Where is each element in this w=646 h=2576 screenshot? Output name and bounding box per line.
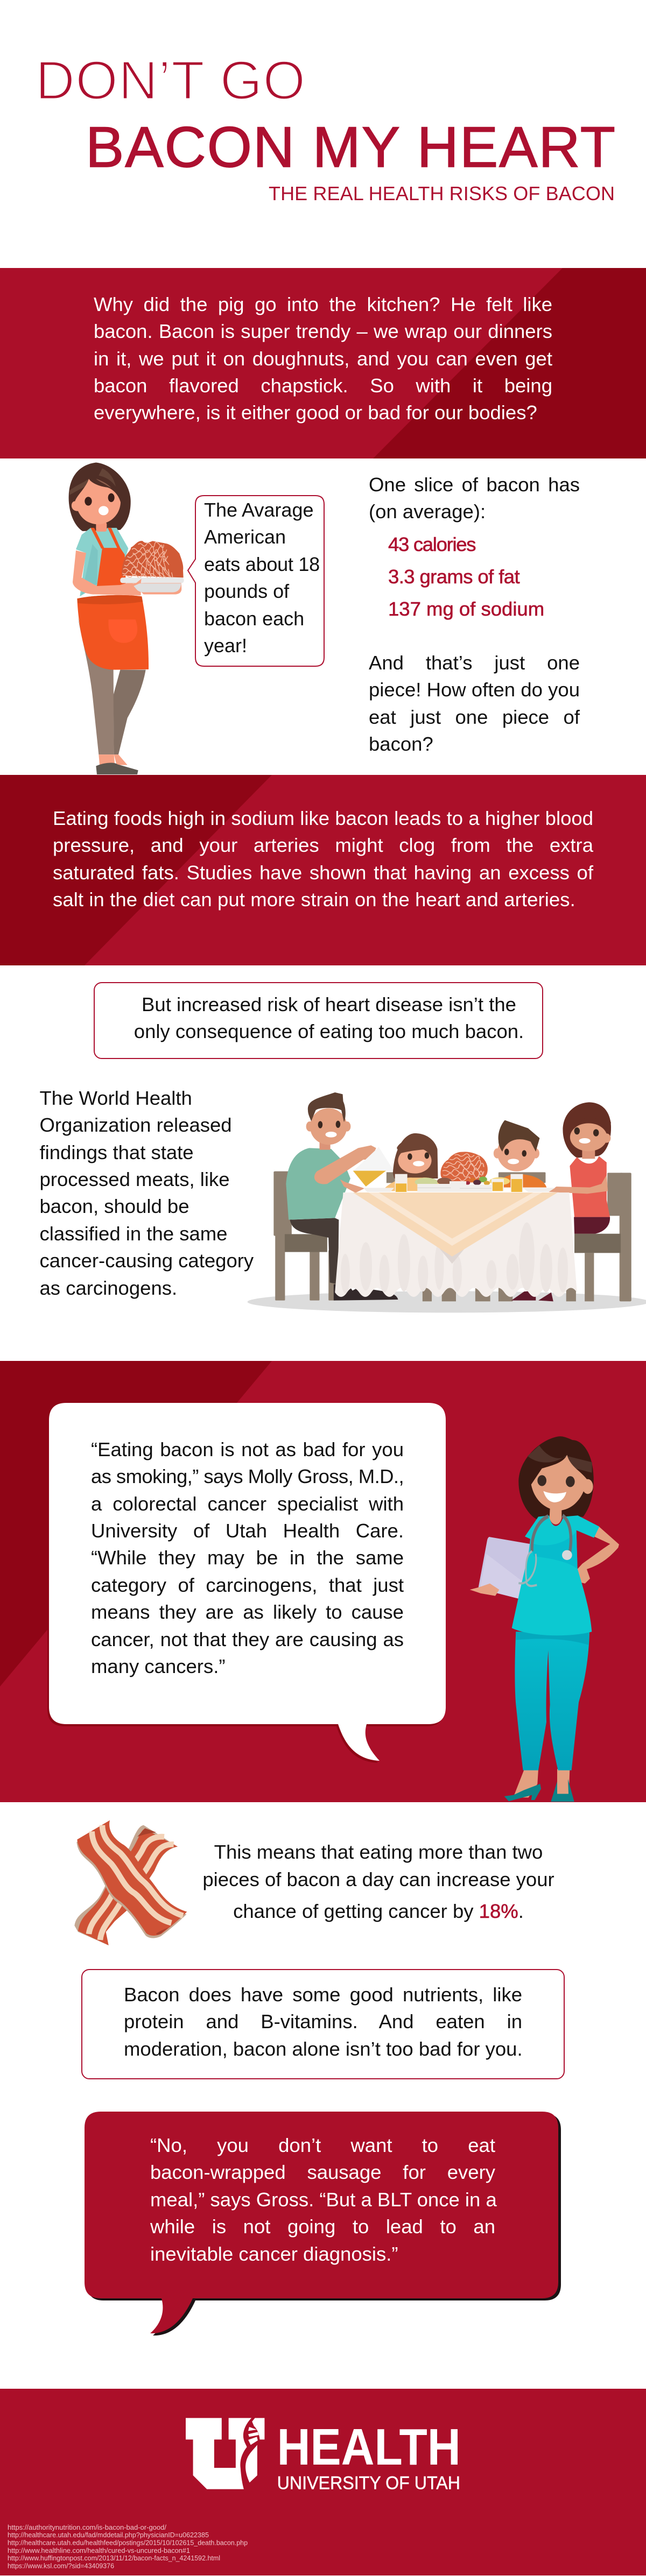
closing question: piece! How often do you <box>369 679 580 701</box>
nurse scrub top <box>512 1515 599 1635</box>
text block: World Health Organization: The World Health <box>40 1087 192 1109</box>
speech bubble: BLT quote <box>81 2107 565 2338</box>
arm <box>73 551 141 595</box>
callout: good nutrients <box>81 1969 565 2079</box>
bacon pile <box>122 541 184 580</box>
sodium text: pressure, and your arteries might clog from the extra <box>53 834 593 856</box>
illustration: crossed bacon strips <box>74 1820 187 1945</box>
closing question: eat just one piece of <box>369 706 580 728</box>
logo: University of Utah Health <box>172 2400 474 2508</box>
clipboard <box>478 1537 530 1600</box>
panel: doctor quote band <box>0 1361 646 1802</box>
girl <box>383 1133 446 1191</box>
stethoscope <box>518 1515 572 1586</box>
sodium band dark corner <box>0 775 272 965</box>
chairs <box>273 1171 631 1301</box>
mouth <box>99 506 109 515</box>
text block: World Health Organization: bacon, should be <box>40 1195 189 1217</box>
text block: 18 percent: chance of getting cancer by 18%. <box>233 1900 524 1922</box>
nurse hand <box>470 1584 499 1596</box>
tablecloth <box>335 1192 577 1297</box>
text block: World Health Organization <box>40 1087 254 1299</box>
man shoes <box>334 1284 398 1301</box>
bubble text <box>204 499 320 657</box>
source list: http://www.healthline.com/health/cured-vs-uncured-bacon#1 <box>8 2546 190 2554</box>
nutrition facts: 137 mg of sodium <box>388 598 544 620</box>
callout text <box>134 993 524 1042</box>
sodium text: Eating foods high in sodium like bacon leads to a higher blood <box>53 807 593 829</box>
text block: World Health Organization: as carcinogens. <box>40 1277 177 1299</box>
logo U mark <box>186 2418 251 2489</box>
quote text: bacon-wrapped sausage for every <box>150 2161 495 2183</box>
quote text: a colorectal cancer specialist with <box>91 1493 404 1514</box>
hair <box>69 462 131 531</box>
intro text <box>94 293 552 424</box>
callout text: only consequence of eating too much bacon. <box>134 1020 524 1042</box>
sodium text: saturated fats. Studies have shown that having an excess of <box>53 862 593 884</box>
quote text: while is not going to lead to an <box>150 2215 495 2238</box>
nurse neck <box>550 1508 561 1525</box>
boy <box>494 1120 546 1188</box>
text block: World Health Organization: processed meats, like <box>40 1168 229 1190</box>
source list: https://authoritynutrition.com/is-bacon-bad-or-good/ <box>8 2523 166 2531</box>
woman <box>511 1102 611 1301</box>
panel: intro band <box>0 268 646 458</box>
hand <box>122 578 142 596</box>
intro band dark corner <box>373 268 646 458</box>
pants <box>78 617 114 754</box>
woman shoes <box>511 1290 553 1301</box>
feet <box>99 754 128 765</box>
subtitle: THE REAL HEALTH RISKS OF BACON <box>269 182 615 204</box>
callout text: moderation, bacon alone isn’t too bad for you. <box>124 2038 523 2060</box>
callout text: Bacon does have some good nutrients, like <box>124 1984 522 2006</box>
quote band dark corner <box>0 1361 272 1686</box>
shirt <box>76 528 128 596</box>
apron <box>90 528 126 586</box>
back strip shadow <box>74 1825 178 1945</box>
glasses of juice <box>395 1174 523 1192</box>
panel: footer band <box>0 2389 646 2575</box>
quote text: means they are as likely to cause <box>91 1601 404 1623</box>
nutrition intro: One slice of bacon has <box>369 474 580 496</box>
quote text: cancer, not that they are causing as <box>91 1628 404 1650</box>
face <box>72 479 121 524</box>
speech bubble: Molly Gross quote <box>47 1403 446 1763</box>
nurse shoes <box>504 1779 574 1802</box>
callout text: But increased risk of heart disease isn’t the <box>142 993 516 1015</box>
nutrition intro <box>369 474 580 523</box>
closing question <box>369 652 580 755</box>
intro text: everywhere, is it either good or bad for our bodies? <box>94 401 537 424</box>
man arms <box>314 1145 376 1184</box>
text block: World Health Organization: classified in the same <box>40 1223 227 1245</box>
title <box>36 51 615 204</box>
text block: World Health Organization: findings that state <box>40 1141 194 1163</box>
nurse hair <box>518 1436 594 1519</box>
callout text <box>124 1981 522 2063</box>
source list <box>0 2523 258 2574</box>
title line: Don't Go: DON’T GO <box>36 51 305 111</box>
bubble text: bacon each <box>204 608 304 630</box>
nurse legs <box>513 1769 570 1797</box>
intro text: bacon flavored chapstick. So with it being <box>94 375 552 397</box>
pitcher <box>353 1147 394 1187</box>
man trousers <box>290 1218 339 1285</box>
text block: 18 percent: This means that eating more than two <box>214 1841 543 1863</box>
source list: http://www.huffingtonpost.com/2013/11/12/bacon-facts_n_4241592.html <box>8 2554 220 2562</box>
source list: http://healthcare.utah.edu/fad/mddetail.php?physicianID=u0622385 <box>8 2531 209 2539</box>
bubble text: pounds of <box>204 580 289 602</box>
front strip shadow <box>76 1823 186 1938</box>
quote text: University of Utah Health Care. <box>91 1520 404 1542</box>
text block: one slice of bacon <box>369 474 580 755</box>
quote text: category of carcinogens, that just <box>91 1574 404 1596</box>
quote text: “No, you don’t want to eat <box>150 2134 495 2156</box>
nutrition facts: 3.3 grams of fat <box>388 566 519 588</box>
text block: World Health Organization: cancer-causing category <box>40 1250 254 1272</box>
intro text: in it, we put it on doughnuts, and you can even get <box>94 348 552 370</box>
title line: Bacon My Heart: BACON MY HEART <box>86 115 615 179</box>
tray <box>133 582 181 595</box>
quote text: many cancers.” <box>91 1655 225 1677</box>
quote text: “While they may be in the same <box>91 1547 404 1569</box>
bubble text: year! <box>204 634 247 657</box>
illustration: woman holding a tray of bacon <box>69 463 184 775</box>
quote text: “Eating bacon is not as bad for you <box>91 1438 404 1460</box>
quote text: as smoking,” says Molly Gross, M.D., <box>91 1465 404 1487</box>
red bubble with shadow <box>81 2107 565 2338</box>
illustration: nurse with stethoscope and clipboard <box>469 1436 619 1802</box>
nurse face <box>531 1455 587 1511</box>
floor shadow <box>248 1291 646 1312</box>
source list: https://www.ksl.com/?sid=43409376 <box>8 2561 114 2570</box>
illustration: family at the dinner table <box>248 1092 646 1313</box>
sodium text: salt in the diet can put more strain on the heart and arteries. <box>53 888 575 911</box>
quote text: inevitable cancer diagnosis.” <box>150 2243 398 2265</box>
eyes <box>85 497 92 506</box>
bubble text: The Avarage <box>204 499 313 521</box>
nurse arm on hip <box>571 1526 619 1584</box>
back strip <box>78 1829 178 1945</box>
callout: heart disease <box>94 982 543 1059</box>
bacon platter <box>440 1152 488 1182</box>
callout text: protein and B-vitamins. And eaten in <box>124 2010 522 2032</box>
speech bubble: average American <box>187 495 325 667</box>
text block: World Health Organization: Organization released <box>40 1114 232 1136</box>
intro text: bacon. Bacon is super trendy – we wrap our dinners <box>94 320 552 342</box>
nutrition intro: (on average): <box>369 500 486 523</box>
sodium text <box>53 807 593 911</box>
bubble text: eats about 18 <box>204 553 320 575</box>
quote text: meal,” says Gross. “But a BLT once in a <box>150 2189 497 2211</box>
bubble shape with tail <box>47 1403 446 1763</box>
text block: 18 percent: pieces of bacon a day can increase your <box>202 1868 554 1890</box>
intro text: Why did the pig go into the kitchen? He felt like <box>94 293 552 315</box>
text block: 18 percent <box>202 1841 554 1922</box>
nutrition facts <box>388 533 544 620</box>
quote text <box>150 2132 495 2268</box>
man <box>286 1092 398 1301</box>
logo DNA strand <box>245 2418 264 2482</box>
bubble outline <box>187 495 325 667</box>
panel: sodium band <box>0 775 646 965</box>
closing question: bacon? <box>369 733 433 755</box>
bubble text: American <box>204 526 286 548</box>
quote text <box>91 1438 404 1677</box>
source list: http://healthcare.utah.edu/healthfeed/postings/2015/10/102615_death.bacon.php <box>8 2539 248 2546</box>
closing question: And that’s just one <box>369 652 580 674</box>
front strip <box>77 1820 187 1936</box>
man head <box>306 1121 313 1132</box>
neck <box>96 522 107 532</box>
man shirt <box>286 1148 350 1220</box>
food on the table <box>363 1176 555 1192</box>
nutrition facts: 43 calories <box>388 533 475 555</box>
